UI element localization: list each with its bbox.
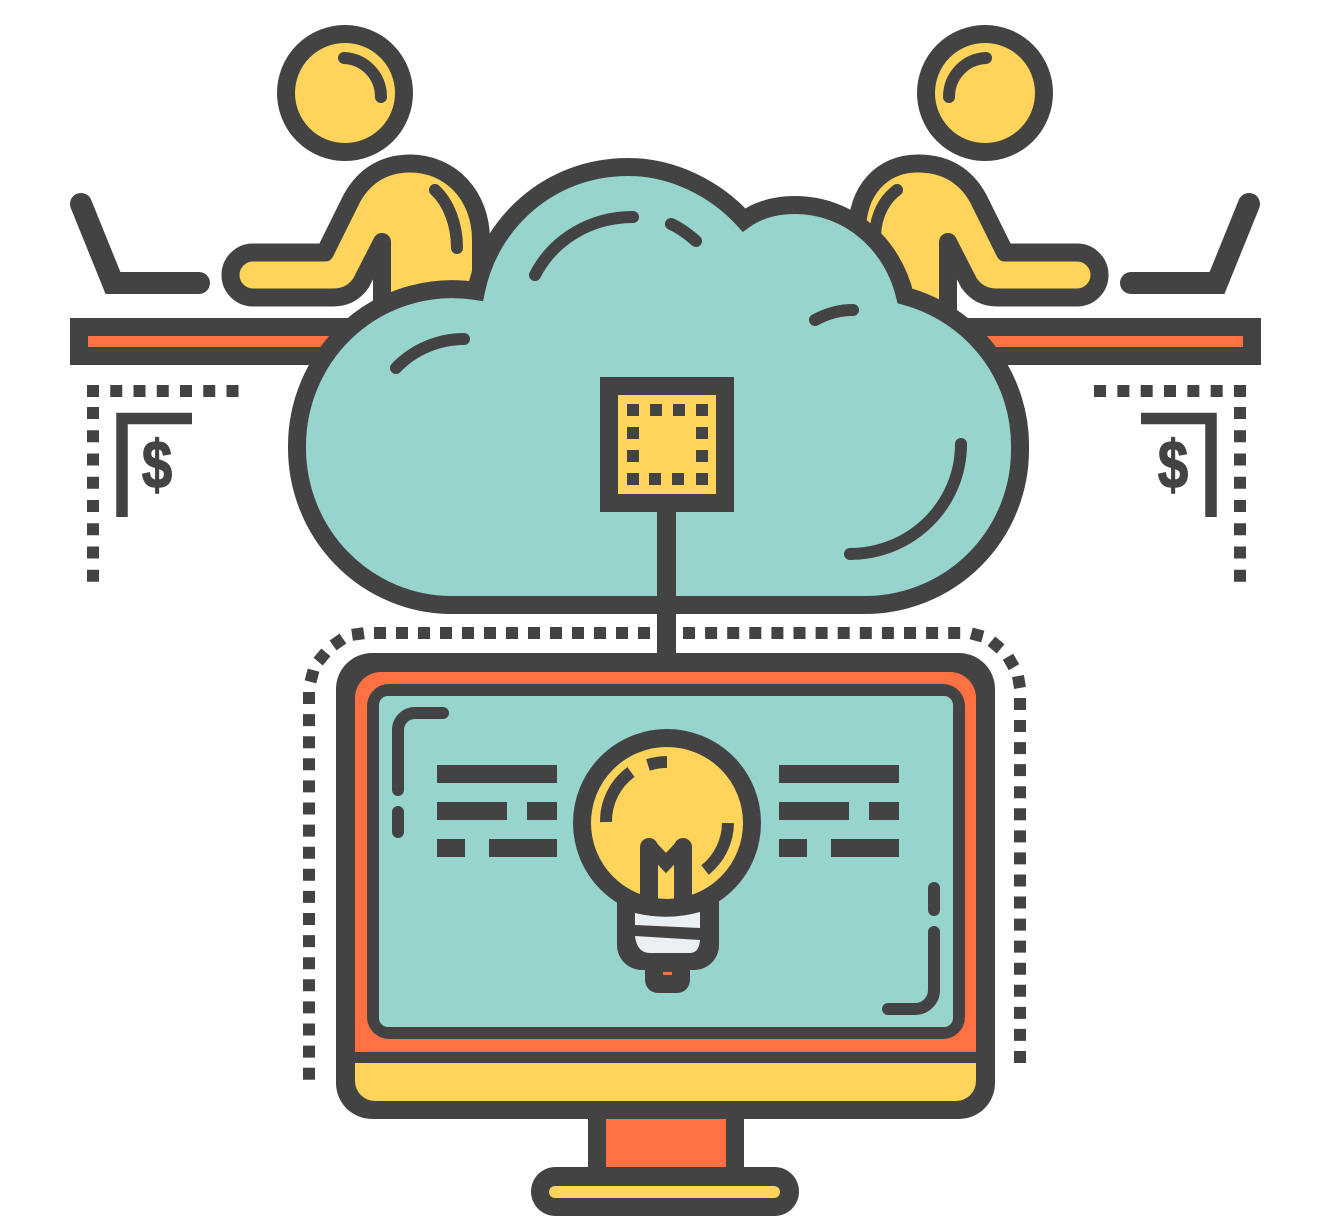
person: left with laptop bbox=[81, 34, 481, 320]
person: right with laptop bbox=[857, 34, 1249, 320]
text lines: left bbox=[437, 765, 557, 857]
dotted corner and dollar: left: $ bbox=[142, 427, 172, 503]
chip bbox=[600, 377, 734, 512]
dotted corner and dollar: right bbox=[1093, 391, 1246, 584]
dotted corner and dollar: left bbox=[87, 391, 240, 584]
monitor stand bbox=[531, 1110, 799, 1216]
icon: light bulb bbox=[582, 738, 752, 993]
cloud bbox=[297, 167, 1020, 605]
dotted corner and dollar: right: $ bbox=[1158, 427, 1188, 503]
desk bbox=[70, 318, 1261, 365]
connector line bbox=[657, 505, 676, 660]
dotted frame around monitor bbox=[305, 627, 1026, 1081]
screen corner highlights bbox=[398, 713, 934, 1009]
text lines: right bbox=[779, 765, 899, 857]
monitor bbox=[336, 653, 995, 1119]
